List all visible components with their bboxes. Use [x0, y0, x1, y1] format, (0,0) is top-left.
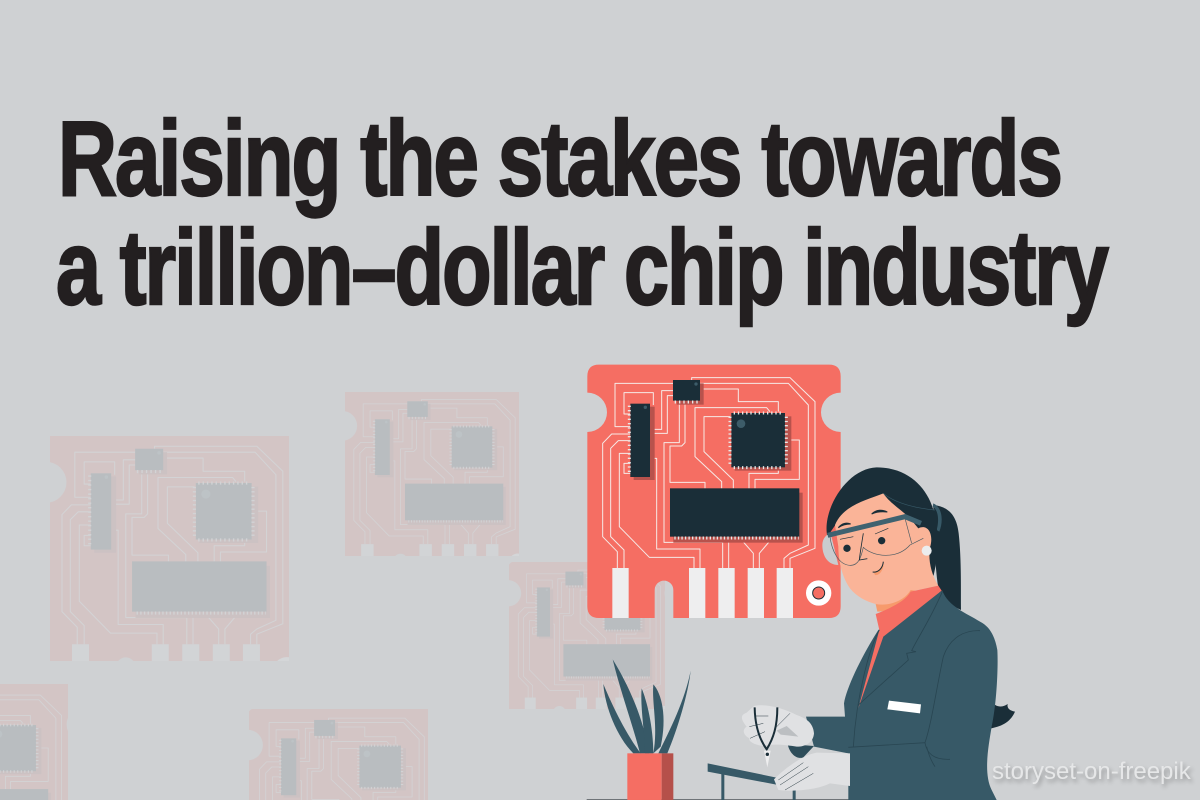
neck shadow — [876, 590, 915, 612]
safety goggles — [822, 517, 923, 565]
main circuit board — [587, 365, 841, 618]
ghost board: bottom middle — [249, 709, 428, 800]
watermark: storyset-on-freepik — [992, 758, 1191, 785]
nose — [859, 533, 867, 560]
title — [56, 100, 1109, 327]
upper glove — [742, 705, 814, 747]
tweezers — [755, 707, 777, 767]
plant pot — [627, 753, 673, 800]
ponytail — [933, 505, 961, 610]
background ghost circuit boards — [0, 390, 678, 800]
wrist shadow — [788, 744, 814, 758]
plant — [603, 659, 691, 800]
ghost board: bottom left — [0, 684, 68, 800]
name badge — [887, 701, 921, 713]
eyes and brows — [838, 510, 888, 552]
jacket lines — [848, 592, 980, 767]
floor line — [587, 798, 860, 800]
face — [835, 493, 938, 605]
illustration: engineer woman, plant and desk — [587, 467, 1015, 800]
mouth — [873, 562, 884, 575]
hair tie — [933, 503, 942, 532]
hair — [827, 467, 938, 577]
ghost board: large left — [50, 436, 289, 661]
ghost board: behind main board — [509, 562, 665, 709]
earring — [922, 546, 932, 556]
hair strand lines — [883, 493, 935, 510]
ghost board: upper middle — [345, 392, 519, 556]
jacket — [806, 591, 998, 800]
lower glove — [774, 753, 850, 791]
turtleneck — [858, 586, 942, 708]
hair tip — [990, 702, 1015, 729]
desk board — [708, 763, 796, 800]
plant leaves — [603, 659, 691, 753]
